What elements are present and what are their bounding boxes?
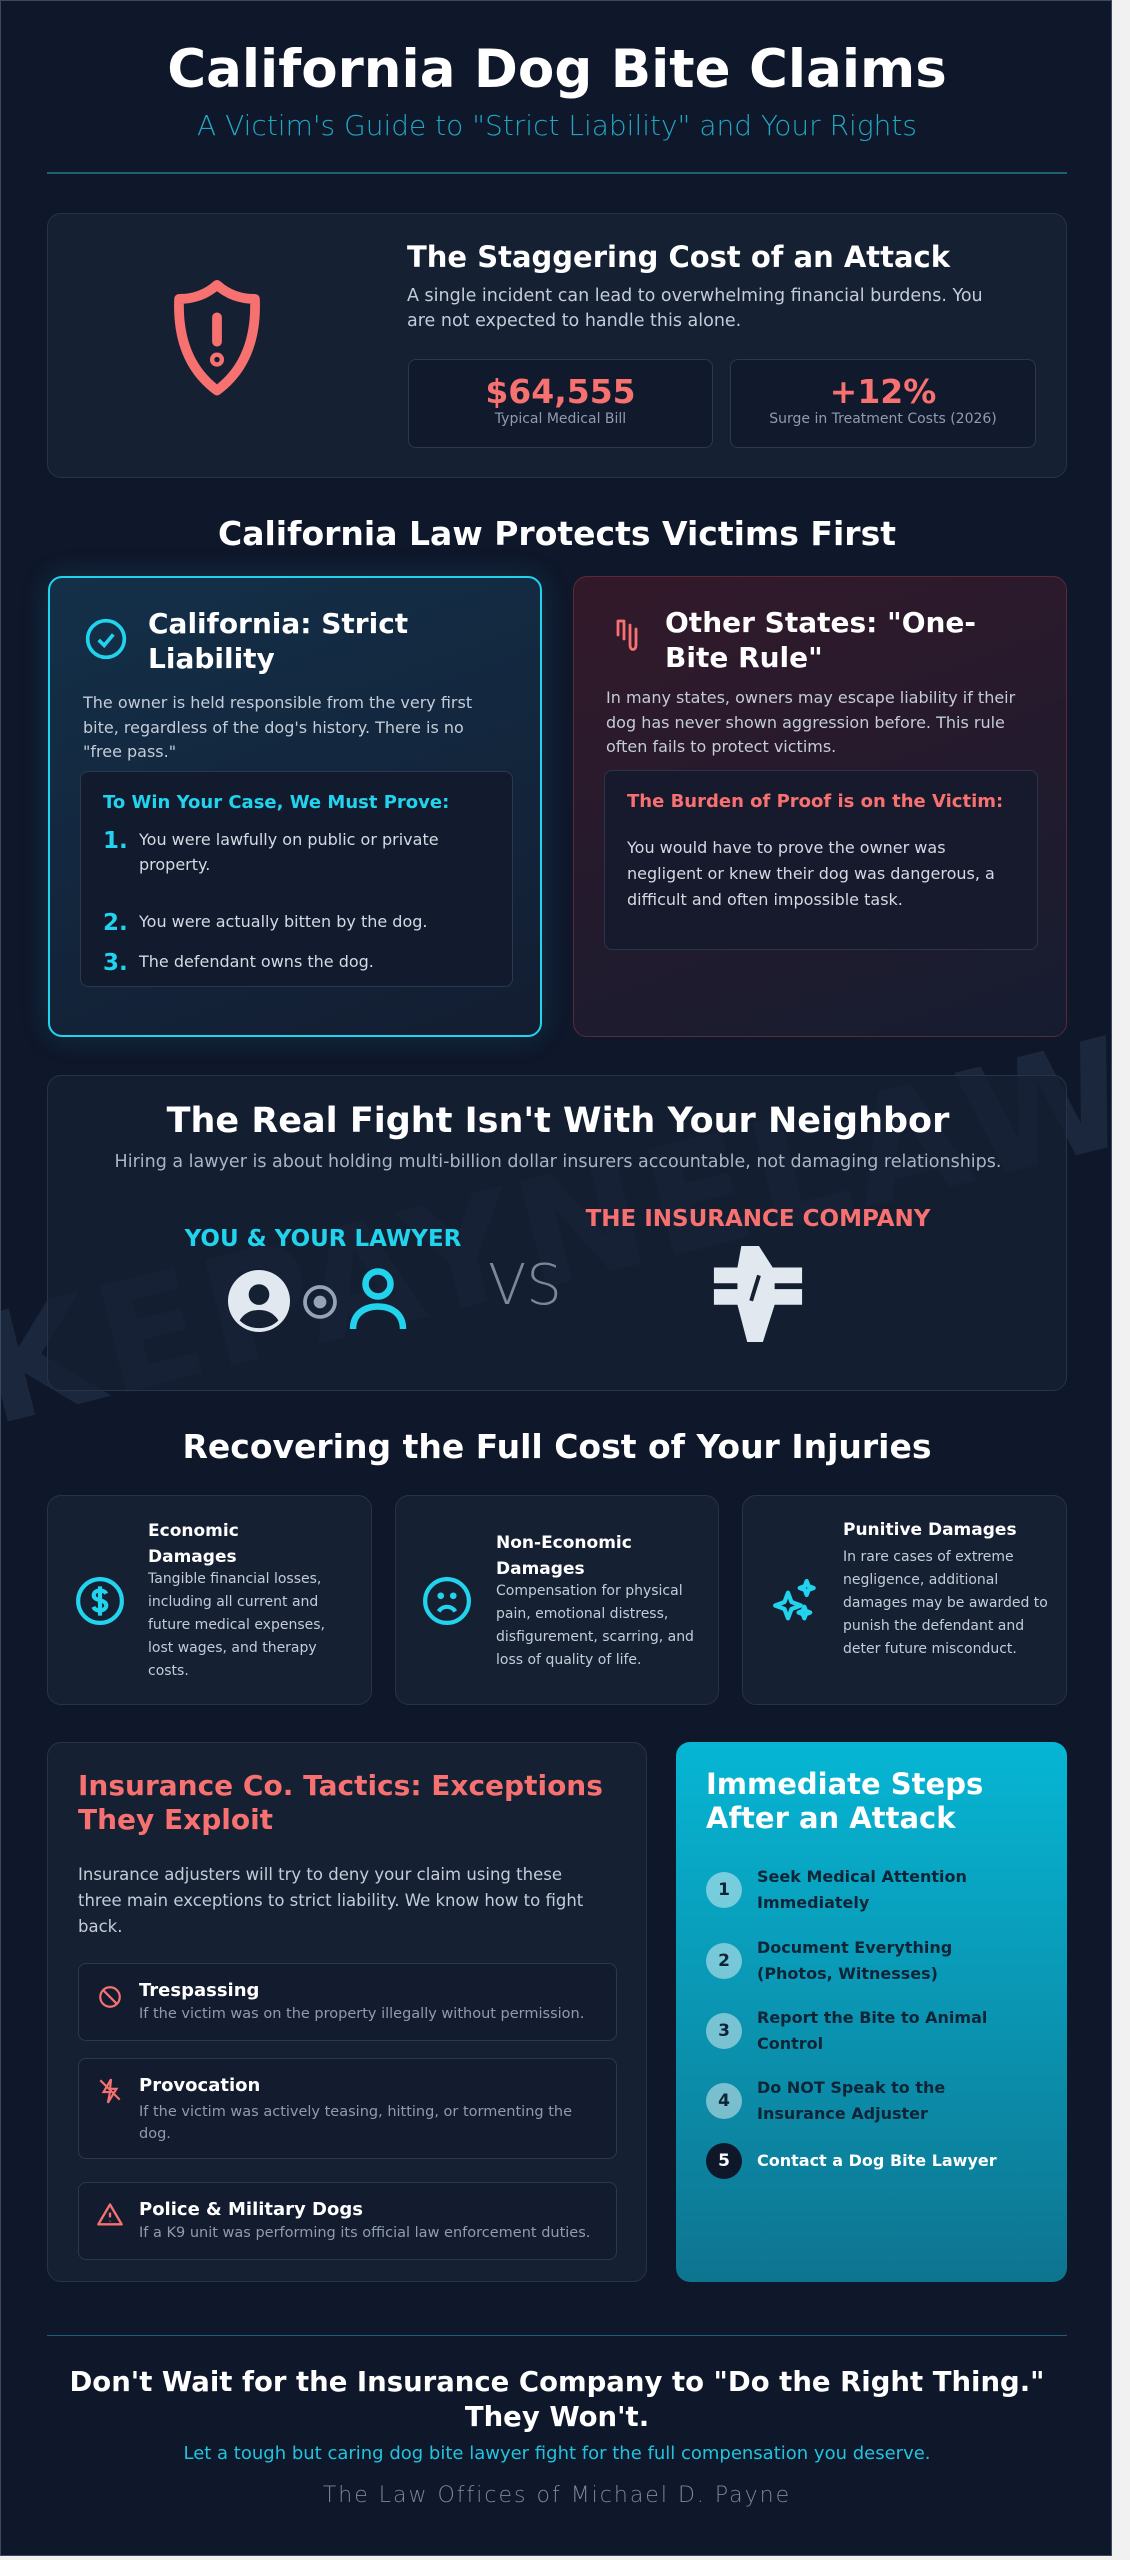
stat: surge: +12% [830, 372, 936, 411]
group: insurance company: THE INSURANCE COMPANY [586, 1206, 930, 1232]
footer subtext: Let a tough but caring dog bite lawyer fight for the full compensation you deserve. [183, 2443, 931, 2464]
step 5 [706, 2143, 997, 2179]
panel: tactics: Insurance adjusters will try to deny your claim using these three main exceptions to strict liability. We know how to fight back. [78, 1865, 583, 1936]
heading: California: Strict [148, 607, 408, 640]
step 3: 3 [718, 2021, 730, 2041]
item: provocation [78, 2058, 617, 2159]
card: economic: Economic [148, 1521, 239, 1541]
icon: check circle [86, 618, 126, 660]
panel: immediate steps: After an Attack [706, 1801, 956, 1835]
item: police dogs: If a K9 unit was performing its official law enforcement duties. [139, 2225, 590, 2241]
item 3 [103, 950, 374, 976]
step 2: Document Everything (Photos, Witnesses) [757, 1938, 952, 1983]
stat: surge: Surge in Treatment Costs (2026) [769, 411, 997, 427]
card: non-economic: Compensation for physical pain, emotional distress, disfigurement, scarring, and loss of quality of life. [496, 1583, 694, 1668]
heading: law protects: California Law Protects Victims First [218, 514, 896, 553]
card: non-economic: Damages [496, 1559, 585, 1579]
item: trespassing: If the victim was on the property illegally without permission. [139, 2006, 584, 2022]
stat: medical bill: Typical Medical Bill [495, 411, 626, 427]
step 1: Seek Medical Attention Immediately [757, 1867, 967, 1912]
text: The owner is held responsible from the very first bite, regardless of the dog's history. There is no "free pass." [83, 693, 472, 761]
panel: tactics: Insurance Co. Tactics: Exceptions They Exploit [78, 1769, 603, 1836]
box: must prove: To Win Your Case, We Must Prove: [103, 792, 449, 813]
item 2: 2. [103, 910, 128, 936]
footer heading: Don't Wait for the Insurance Company to "Do the Right Thing." They Won't. [69, 2366, 1045, 2433]
item 1: You were lawfully on public or private property. [139, 830, 439, 874]
icon: user [228, 1270, 290, 1332]
icon: lawyer [350, 1268, 406, 1329]
stat: medical bill [408, 359, 713, 448]
footer firm name: The Law Offices of Michael D. Payne [323, 2483, 791, 2508]
step 5: 5 [718, 2151, 730, 2171]
panel: staggering cost [47, 213, 1067, 478]
step 1: 1 [718, 1880, 730, 1900]
group: insurance company [586, 1206, 931, 1342]
text: In many states, owners may escape liability if their dog has never shown aggression before. This rule often fails to protect victims. [606, 688, 1015, 756]
icon: building [714, 1246, 802, 1342]
heading [148, 607, 408, 675]
item 2 [103, 910, 427, 936]
subtitle: A Victim's Guide to "Strict Liability" and Your Rights [197, 109, 917, 142]
title: California Dog Bite Claims [167, 39, 947, 100]
card: non-economic [395, 1495, 719, 1705]
heading: The Staggering Cost of an Attack [407, 240, 950, 274]
item: provocation: If the victim was actively teasing, hitting, or tormenting the dog. [139, 2104, 572, 2142]
icon: dot [303, 1285, 337, 1319]
box: burden of proof: The Burden of Proof is on the Victim: [627, 791, 1003, 812]
step 3: Report the Bite to Animal Control [757, 2008, 987, 2053]
box: burden of proof: You would have to prove the owner was negligent or knew their dog was dangerous, a difficult and often impossible task. [627, 838, 995, 909]
item: provocation: Provocation [139, 2075, 260, 2096]
group: you & lawyer [184, 1226, 461, 1332]
card: economic: Tangible financial losses, including all current and future medical expenses, lost wages, and therapy costs. [148, 1571, 325, 1679]
heading: Liability [148, 642, 275, 675]
step 4: Do NOT Speak to the Insurance Adjuster [757, 2078, 945, 2123]
panel: real fight [47, 1075, 1067, 1391]
text: A single incident can lead to overwhelming financial burdens. You are not expected to handle this alone. [407, 286, 983, 331]
item: trespassing: Trespassing [139, 1980, 259, 2001]
item: police dogs [78, 2182, 617, 2260]
item: trespassing [78, 1963, 617, 2041]
item: police dogs: Police & Military Dogs [139, 2199, 363, 2220]
card: economic [47, 1495, 372, 1705]
step 4: 4 [718, 2091, 730, 2111]
item 2: You were actually bitten by the dog. [139, 912, 427, 931]
step 5: Contact a Dog Bite Lawyer [757, 2151, 997, 2170]
box: must prove [80, 771, 513, 987]
icon: shield alert [174, 280, 260, 396]
card: punitive [742, 1495, 1067, 1705]
panel: immediate steps [676, 1742, 1067, 2282]
step 2: 2 [718, 1951, 730, 1971]
card: punitive: In rare cases of extreme negligence, additional damages may be awarded to punish the defendant and deter future misconduct. [843, 1549, 1048, 1657]
heading: Bite Rule" [665, 641, 823, 674]
heading: Other States: "One- [665, 606, 976, 639]
card: punitive: Punitive Damages [843, 1520, 1017, 1540]
panel: tactics [47, 1742, 647, 2282]
heading: The Real Fight Isn't With Your Neighbor [167, 1101, 949, 1141]
box: burden of proof [604, 770, 1038, 950]
panel: california strict liability [48, 576, 542, 1037]
item 1: 1. [103, 828, 128, 854]
panel: other states [573, 576, 1067, 1037]
VS: VS [488, 1253, 562, 1318]
heading [665, 606, 976, 674]
card: non-economic: Non-Economic [496, 1533, 632, 1553]
card: economic: Damages [148, 1547, 237, 1567]
panel: immediate steps: Immediate Steps [706, 1767, 983, 1801]
icon: hand [616, 620, 638, 651]
stat: surge [730, 359, 1036, 448]
item 3: The defendant owns the dog. [139, 952, 374, 971]
group: you & lawyer: YOU & YOUR LAWYER [185, 1226, 461, 1252]
subtext: Hiring a lawyer is about holding multi-billion dollar insurers accountable, not damaging relationships. [115, 1152, 1001, 1172]
stat: medical bill: $64,555 [485, 372, 636, 411]
item 3: 3. [103, 950, 128, 976]
heading: recovering: Recovering the Full Cost of Your Injuries [182, 1427, 932, 1466]
